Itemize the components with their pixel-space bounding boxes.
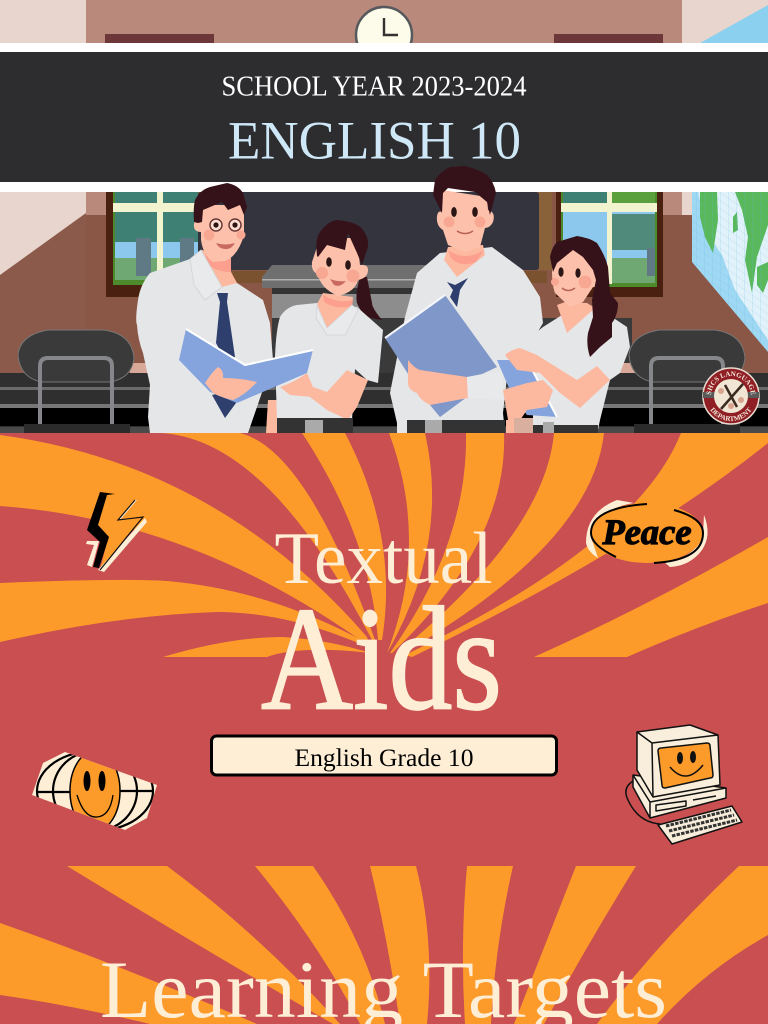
sunburst rays: [0, 433, 768, 657]
students illustration: [136, 166, 760, 433]
panel: learning targets: [0, 866, 768, 1024]
wall map: [692, 192, 768, 352]
classroom background: [0, 0, 768, 433]
blackboard: [198, 192, 552, 283]
icon: school department badge: [702, 367, 760, 425]
title: Aids: Aids: [261, 578, 502, 742]
teacher's desk: [262, 265, 632, 374]
icon: wall clock: [356, 7, 412, 63]
right chair: [629, 330, 745, 433]
course title: ENGLISH 10: [228, 110, 521, 170]
icon: peace badge: Peace: [601, 512, 692, 552]
student: tall boy with folder: [385, 166, 543, 433]
student: girl with long hair: [497, 236, 630, 433]
sunburst rays lower: [0, 866, 768, 1024]
school year text: SCHOOL YEAR 2023-2024: [222, 72, 526, 102]
grade label: English Grade 10: [294, 745, 474, 772]
white band top: [0, 43, 768, 52]
left window: [106, 192, 206, 297]
icon: school department badge: SHCS LANGUAGE: [706, 371, 756, 395]
title: Textual: Textual: [274, 518, 492, 600]
student: girl with ponytail: [266, 220, 383, 433]
icon: peace badge: [586, 500, 708, 567]
right window: [556, 192, 663, 297]
icon: lightning bolt: [86, 492, 147, 572]
icon: smiley computer: [626, 725, 742, 844]
header banner: [0, 52, 768, 182]
white band bottom: [0, 182, 768, 192]
grade label: [212, 736, 556, 775]
icon: school department badge: DEPARTMENT: [710, 407, 752, 422]
student desks: [0, 363, 768, 433]
left chair: [18, 330, 134, 433]
icon: smiley globe: [32, 751, 157, 831]
panel: textual aids cover: [0, 433, 768, 866]
student: boy with glasses: [136, 183, 313, 433]
